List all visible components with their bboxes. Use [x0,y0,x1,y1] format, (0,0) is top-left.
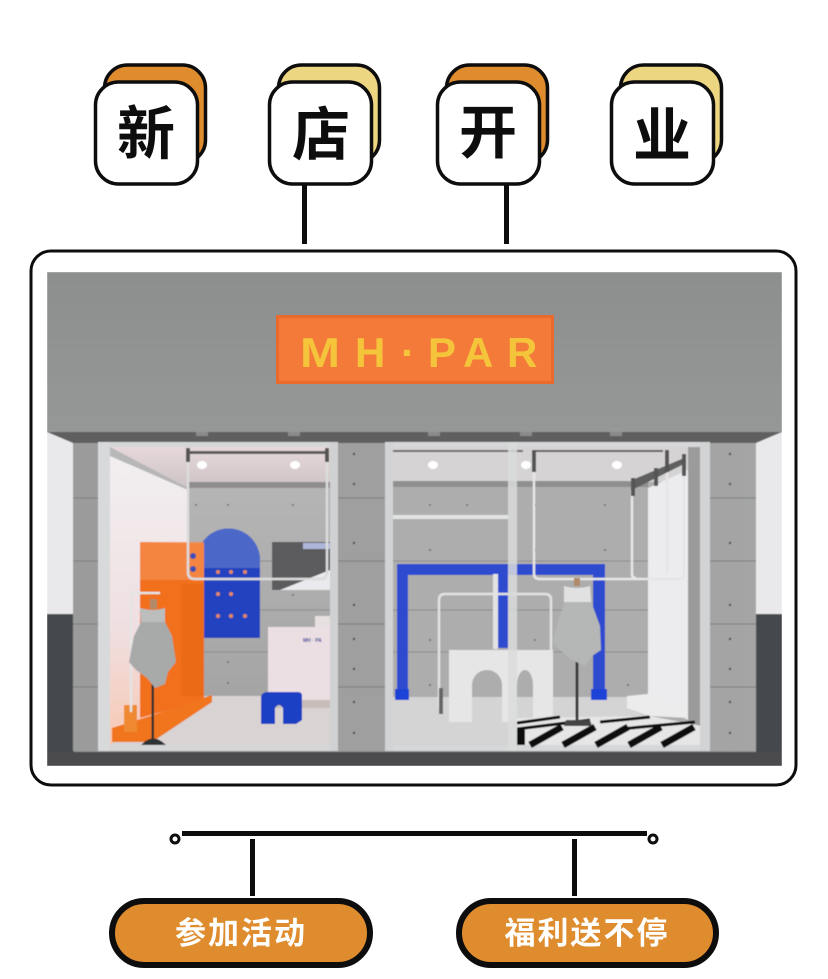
left window [98,442,338,751]
counter [268,627,330,700]
tv screen [272,542,330,590]
tile: 店: 店 [292,103,350,168]
left mannequin [129,599,176,745]
sign: MH·PAR: · [401,329,415,376]
sign: MH·PAR: A [463,329,493,376]
sign: MH·PAR: H [355,329,385,376]
photo frame [31,251,796,785]
sign: MH·PAR: M [300,329,340,376]
storefront scene [47,272,782,766]
connector: bottom left [250,839,255,896]
white rails [439,594,551,708]
white transom [393,515,508,519]
button: 参加活动: 参加活动 [175,916,307,951]
button: 福利送不停 [459,901,716,965]
white arched table [449,650,553,722]
left window: MH · PA [303,638,322,644]
hanging glass rail [188,448,327,579]
mullion [508,442,517,751]
connector: top left [302,185,307,244]
connector: top right [504,185,509,244]
tile: 业 [612,65,722,184]
concrete columns [73,443,756,751]
right mannequin [553,578,601,726]
left rail [131,593,160,712]
blue frame [397,564,605,700]
tile: 新 [96,65,206,184]
sign: MH·PAR: R [507,329,537,376]
striped platform [517,716,702,745]
button: 参加活动 [112,901,370,965]
tile: 开 [438,65,548,184]
connector: bottom right [572,839,577,896]
fascia wall [47,272,782,432]
tile: 店 [270,65,380,184]
stool [261,692,302,724]
button: 福利送不停: 福利送不停 [504,916,670,951]
tile: 新: 新 [117,102,175,167]
sign: MH·PAR [276,315,554,384]
orange panel [140,542,204,718]
right window [385,442,710,751]
tile: 业: 业 [633,104,691,169]
sign: MH·PAR: P [428,329,456,376]
bracket line [171,831,657,843]
blue arch board [197,528,260,638]
tile: 开: 开 [459,101,517,166]
